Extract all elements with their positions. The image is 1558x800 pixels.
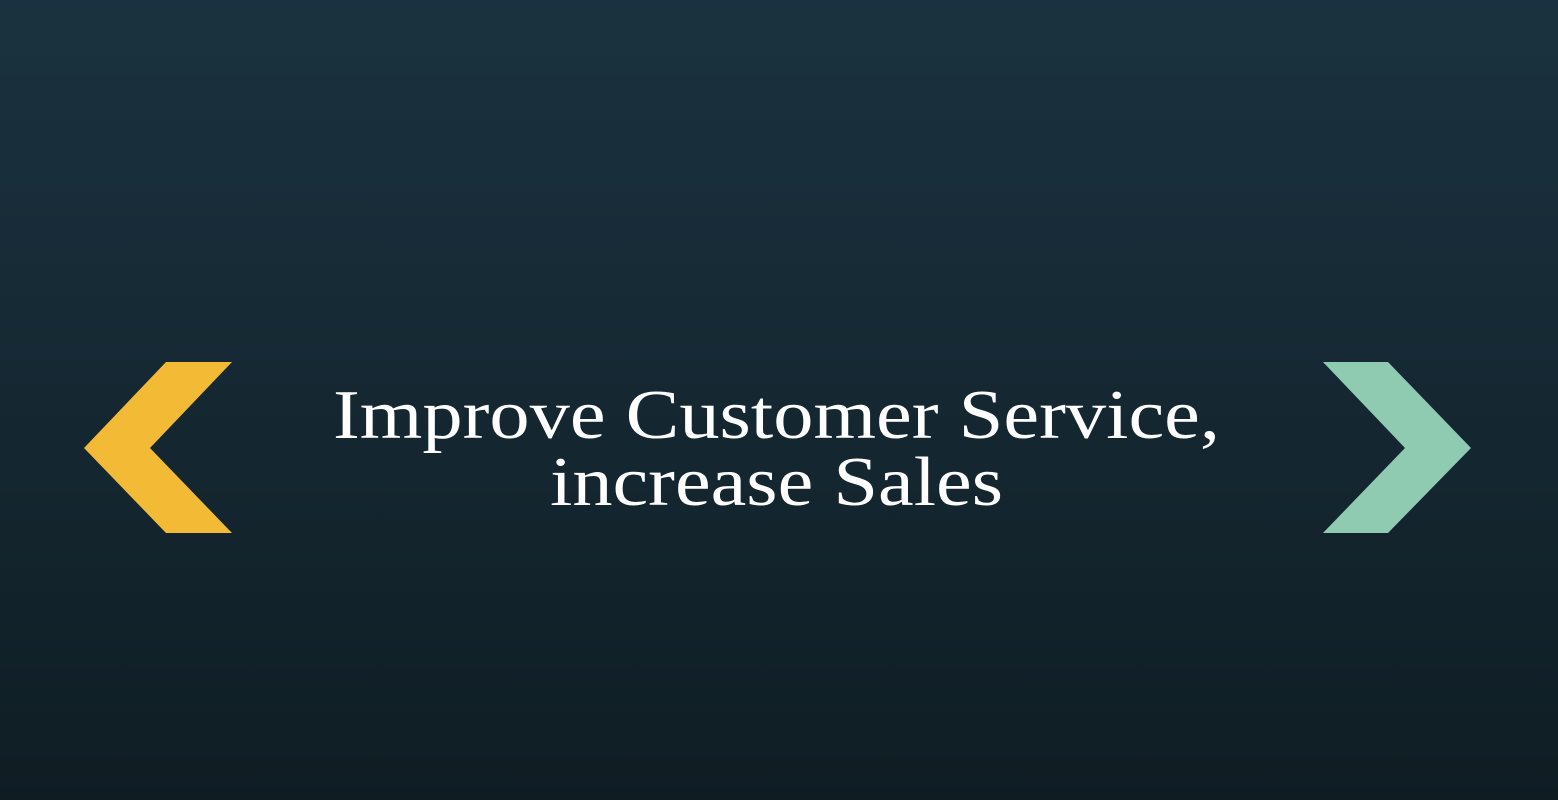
title [333, 377, 1220, 521]
icon: left yellow chevron [84, 362, 232, 533]
title: Improve Customer Service, [333, 377, 1220, 454]
title: increase Sales [550, 444, 1003, 521]
icon: right green chevron [1323, 362, 1471, 533]
